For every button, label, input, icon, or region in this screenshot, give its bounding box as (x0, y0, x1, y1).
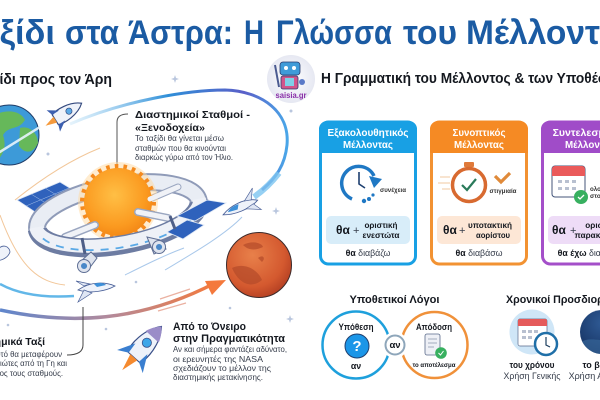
circle: condition: αν (351, 361, 361, 371)
trajectory: thin orange arc (0, 148, 100, 285)
label: genitive use (504, 360, 561, 381)
text block: space stations (135, 109, 251, 162)
diagram: conditional clauses (322, 312, 468, 378)
icon: clock (342, 166, 382, 203)
label: genitive use: Χρήση Γενικής (504, 371, 561, 381)
callout line: stations (117, 114, 128, 165)
sun (78, 162, 158, 242)
formula pill (326, 216, 410, 244)
icon: rocket bottom (109, 315, 174, 382)
formula pill (437, 216, 521, 244)
formula pill: ενεστώτα (362, 231, 400, 240)
panel header: Εξακολουθητικός (328, 127, 409, 139)
ring joints (82, 216, 175, 254)
label: completed (590, 186, 600, 200)
circle: result: το αποτέλεσμα (412, 361, 456, 369)
panel: continuous future (319, 121, 417, 264)
icon: Mars (226, 232, 292, 298)
text block: from dream to reality: διαστημικής μετακίνησης. (173, 373, 263, 382)
text block: space stations: διαρκώς γύρω από τον Ήλιο. (135, 153, 233, 162)
panel: simple future (430, 121, 528, 264)
formula pill: + (570, 225, 576, 237)
panel header: Συνοπτικός (452, 127, 506, 139)
text block: space stations: Διαστημικοί Σταθμοί - (135, 109, 251, 121)
spokes (65, 187, 178, 237)
formula pill: + (459, 225, 465, 237)
formula pill: οριστική (364, 221, 398, 230)
example: θα διαβάσω (456, 248, 503, 258)
icon: calendar with clock (510, 310, 557, 355)
icon: shuttle upper right (218, 188, 263, 226)
trajectory: upper blue arc (70, 90, 287, 197)
text block: from dream to reality: στην Πραγματικότητα (173, 333, 285, 345)
example: θα διαβάζω (346, 248, 391, 258)
logo: saisia.gr robot: saisia.gr (276, 91, 306, 100)
callout line: taxis (67, 307, 83, 355)
formula pill: + (353, 225, 359, 237)
text block: from dream to reality: Αν και σήμερα φαντάζει αδύνατο, (173, 345, 287, 354)
text block: from dream to reality: οι ερευνητές της NASA (173, 355, 264, 364)
icon: shuttle left edge (0, 246, 10, 261)
icon: night sky (580, 310, 600, 356)
trajectory: arrow to Mars (0, 217, 242, 318)
panel header (328, 127, 409, 151)
circle: condition: Υπόθεση (338, 322, 374, 332)
title: Γλώσσα (276, 14, 392, 52)
title: Η (244, 14, 264, 52)
formula pill: θα (443, 223, 457, 237)
panel header: Μέλλοντας (454, 139, 504, 151)
circle: condition: ? (352, 338, 362, 355)
text block: space stations: «Ξενοδοχεία» (135, 122, 205, 134)
title: Άστρα: (128, 14, 233, 52)
icon: Earth (0, 105, 40, 165)
formula pill (548, 216, 600, 244)
ring back (32, 171, 199, 229)
text block: space stations: Το ταξίδι θα γίνεται μέσω (135, 134, 224, 143)
title (0, 14, 600, 52)
solar panels right (167, 200, 226, 239)
panel: perfect future (541, 121, 600, 264)
icon: shuttle bottom (76, 281, 115, 302)
text block: space stations: σταθμών που θα κινούνται (135, 144, 226, 153)
illustration: space station and sun (17, 162, 226, 272)
icon: calendar (552, 166, 588, 204)
title: του (403, 14, 457, 52)
formula pill: υποτακτική (468, 221, 512, 230)
formula pill: θα (336, 223, 350, 237)
engines (78, 237, 166, 272)
label: continuity: συνέχεια (380, 187, 406, 194)
panel header (553, 127, 600, 151)
icon: stopwatch (438, 162, 510, 202)
text block: from dream to reality: Από το Όνειρο (173, 321, 246, 333)
connector: if (382, 332, 408, 358)
formula pill: θα (552, 223, 566, 237)
solar panels left (17, 182, 78, 212)
trajectory: lower blue arc (0, 284, 74, 297)
logo: saisia.gr robot (267, 55, 315, 103)
connector: if: αν (389, 340, 401, 351)
decorative sparkles (7, 75, 294, 330)
panel header (452, 127, 506, 151)
text block: space taxis (0, 336, 67, 378)
icon: rocket near Earth (39, 93, 88, 137)
circle: result (402, 312, 468, 378)
circle: condition (322, 312, 390, 378)
text block: from dream to reality (173, 321, 287, 382)
formula pill: αορίστου (476, 231, 510, 240)
circle: result: Απόδοση (416, 322, 452, 332)
text block: from dream to reality: σχεδιάζουν το μέλλον της (173, 364, 271, 373)
label: accusative use (569, 360, 600, 381)
upper spoke (150, 187, 178, 199)
label: genitive use: του χρόνου (510, 360, 554, 370)
ring front (36, 199, 205, 262)
label: momentary: στιγμιαία (490, 188, 516, 195)
panel header: Μέλλοντας (343, 139, 393, 151)
title: στα (65, 14, 119, 52)
heading: conditionals: Υποθετικοί Λόγοι (350, 294, 440, 306)
